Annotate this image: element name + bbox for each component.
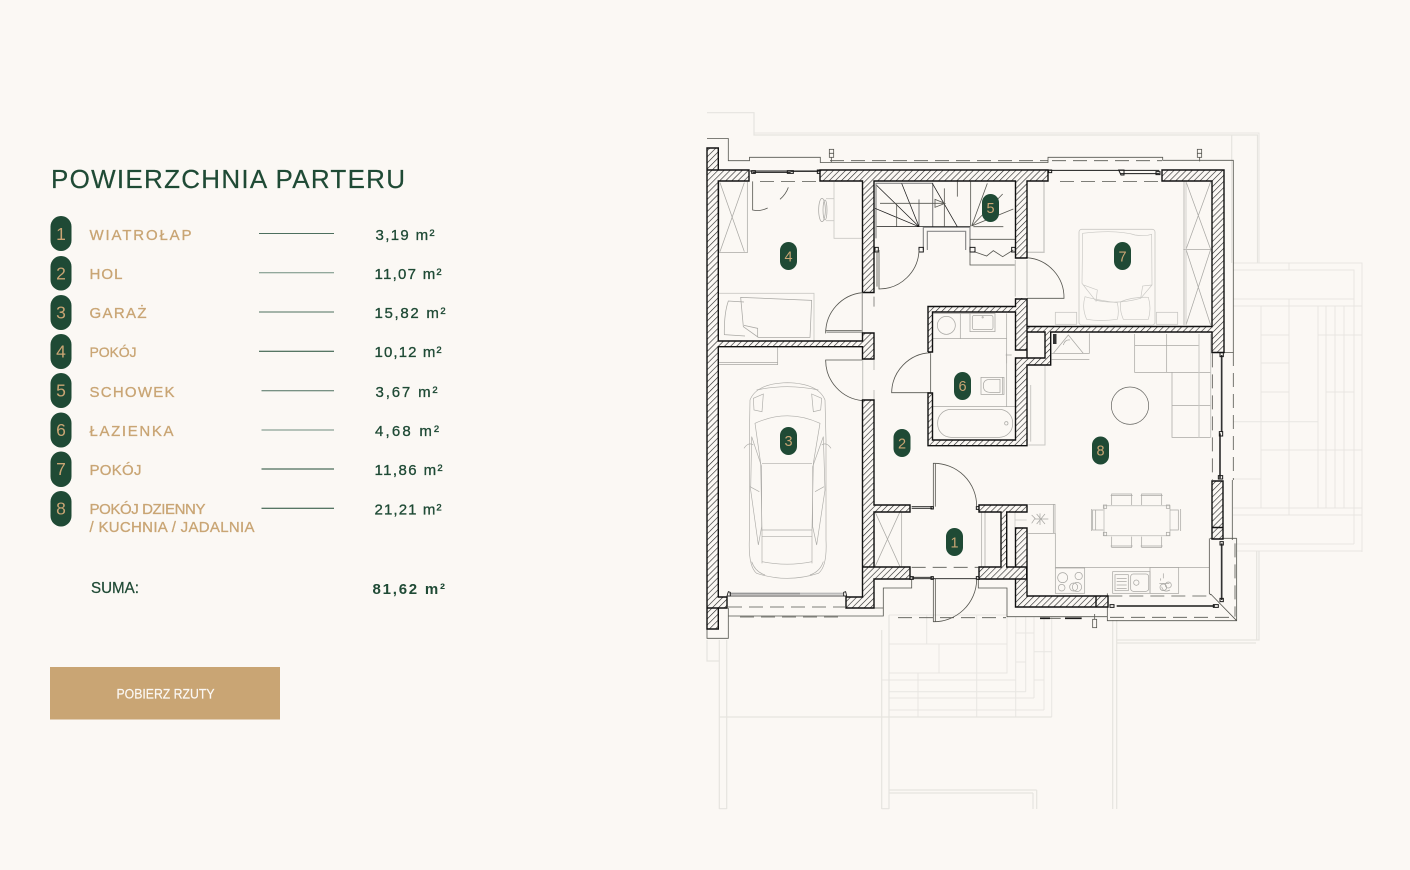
row 8: pokój dzienny / kuchnia / jadalnia: POKÓJ DZIENNY: [90, 501, 206, 518]
row 3: garaż: 3: [56, 302, 66, 322]
total value: 81,62 m²: [372, 581, 445, 598]
row 4: pokój: POKÓJ: [90, 344, 136, 360]
inner door: [912, 463, 979, 509]
row 2: hol: 2: [56, 264, 66, 284]
wall hatching: [707, 148, 1224, 629]
floor plan: [707, 113, 1362, 809]
vents and gutter: [1040, 614, 1097, 628]
stairs: [875, 182, 1015, 265]
row 6: łazienka: ŁAZIENKA: [90, 423, 174, 440]
row 8: pokój dzienny / kuchnia / jadalnia: [50, 491, 442, 536]
right furniture: living room and kitchen: [1007, 333, 1237, 628]
outer door: [910, 577, 979, 622]
row 6: łazienka: 4,68 m²: [375, 423, 439, 440]
row 5: schowek: [50, 373, 438, 408]
wardrobe room 7: [1183, 182, 1212, 325]
fridge and hood: [1028, 504, 1209, 567]
bathtub and toilet: [932, 353, 1015, 437]
badge 7: [1114, 242, 1131, 270]
badge 2: 2: [898, 436, 906, 452]
badge 1: [946, 528, 963, 556]
chimney vent: [1053, 334, 1056, 344]
badge 7: 7: [1118, 250, 1127, 266]
terrace and paving lines: [707, 113, 1362, 809]
left furniture: room 4, stairs and bathroom: [719, 181, 1064, 363]
row 1: wiatrołap: [50, 216, 434, 251]
garage shelf: [719, 347, 778, 365]
sofa: [1135, 334, 1211, 437]
stove: [1055, 568, 1085, 593]
wardrobe room 4: [719, 182, 747, 253]
badge 6: [954, 372, 971, 400]
row 1: wiatrołap: 3,19 m²: [376, 227, 434, 244]
window swing: [753, 181, 788, 211]
window room 7: [1049, 170, 1160, 175]
kitchen closets edge: [1007, 511, 1027, 567]
row 7: pokój: [50, 452, 442, 487]
second gutter and room 4 window: [750, 149, 834, 173]
row 7: pokój: 11,86 m²: [374, 462, 442, 479]
door frames at stairs: [875, 247, 1015, 252]
row 8: pokój dzienny / kuchnia / jadalnia: / KUCHNIA / JADALNIA: [90, 519, 254, 536]
badge 4: 4: [784, 250, 793, 266]
row 5: schowek: SCHOWEK: [90, 384, 174, 401]
row 8: pokój dzienny / kuchnia / jadalnia: 21,21 m²: [374, 502, 442, 518]
badge 2: [894, 429, 910, 457]
coffee table: [1111, 387, 1149, 424]
badge 4: [780, 242, 797, 270]
row 8: pokój dzienny / kuchnia / jadalnia: 8: [56, 498, 66, 518]
badge 8: 8: [1096, 444, 1105, 460]
row 6: łazienka: 6: [56, 420, 66, 440]
windows: [1110, 353, 1223, 607]
lower left details: garage, car, hall: [719, 347, 1027, 622]
row 2: hol: 11,07 m²: [374, 266, 442, 283]
row 4: pokój: 4: [56, 342, 66, 362]
row 5: schowek: 3,67 m²: [376, 384, 438, 401]
download button: POBIERZ RZUTY: [116, 686, 214, 702]
vestibule dashed threshold: [912, 566, 978, 569]
row 3: garaż: 15,82 m²: [374, 305, 446, 322]
row 1: wiatrołap: WIATROŁAP: [90, 227, 192, 244]
sink: [1113, 572, 1150, 593]
badge 3: 3: [784, 434, 793, 450]
row 2: hol: HOL: [90, 266, 122, 283]
dining table: [1092, 494, 1181, 547]
row 5: schowek: 5: [56, 380, 66, 400]
right furniture: room 7: [1027, 149, 1212, 325]
badge 1: 1: [950, 536, 959, 552]
row 1: wiatrołap: 1: [56, 224, 66, 244]
crockery: [1150, 567, 1179, 593]
badge 5: 5: [986, 201, 995, 217]
room 7 door: [1015, 258, 1064, 298]
row 3: garaż: GARAŻ: [90, 304, 146, 322]
badge 3: [780, 427, 797, 455]
bath door and leaf: [892, 353, 931, 393]
row 7: pokój: POKÓJ: [90, 462, 142, 479]
closet room 7: [1027, 182, 1044, 252]
badge 6: 6: [958, 379, 967, 395]
row 4: pokój: [50, 334, 442, 369]
badge 8: [1092, 436, 1109, 464]
bathroom fittings top: [932, 313, 1012, 363]
garage gate: [727, 592, 847, 596]
row 3: garaż: [50, 295, 446, 330]
gutter: [1197, 149, 1202, 161]
bed room 7: [1055, 229, 1178, 325]
row 4: pokój: 10,12 m²: [374, 344, 442, 361]
outer thin outlines: [707, 138, 1233, 638]
badge 5: [982, 194, 999, 222]
closet under bath: [1028, 365, 1045, 445]
garage door: [826, 360, 874, 401]
desk and chair: [819, 182, 862, 238]
wall outlines: [707, 148, 1224, 629]
room list: [50, 216, 446, 536]
title: POWIERZCHNIA PARTERU: [51, 164, 405, 194]
doors: [826, 250, 919, 333]
total label: SUMA:: [91, 580, 139, 597]
vestibule wardrobe: [874, 511, 985, 567]
download button: [50, 667, 280, 720]
dashed and bay lines: [1007, 353, 1237, 621]
row 6: łazienka: [50, 412, 439, 448]
car: [744, 383, 831, 578]
row 7: pokój: 7: [56, 459, 66, 479]
bed room 4: [719, 293, 814, 340]
fireplace corner: [1052, 333, 1089, 359]
row 2: hol: [50, 256, 442, 290]
